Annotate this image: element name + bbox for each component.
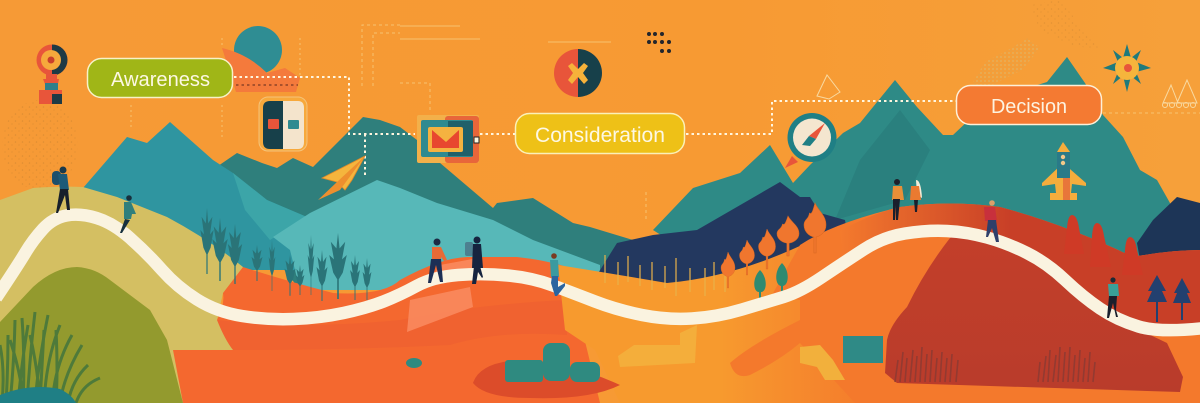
- label: Consideration: [516, 114, 684, 154]
- ground: small teal pebble: [406, 358, 422, 368]
- ground: yellow stone: [800, 345, 845, 380]
- speckle texture top right: [1030, 0, 1100, 50]
- ground: yellow orange: [558, 245, 880, 403]
- person: orange jacket walker: [428, 238, 447, 283]
- label: Decision: Decision: [991, 96, 1067, 118]
- icon: triangles and circles: [817, 75, 1197, 108]
- person: hiker on left hill: [52, 166, 70, 213]
- decorative circuit lines: [131, 25, 1200, 222]
- ground: darker orange band: [213, 300, 567, 350]
- back mountains: [83, 57, 1200, 290]
- green round trees: [754, 263, 788, 299]
- grass bottom left: [0, 312, 100, 403]
- teal mound bottom left: [0, 387, 76, 403]
- grass stems on yellow slope: [605, 255, 725, 296]
- icon: X badge: [554, 49, 602, 97]
- mountain: light teal: [273, 180, 600, 290]
- mountain: teal facet: [233, 173, 307, 240]
- sand texture upper right: [972, 38, 1040, 86]
- label: Consideration: Consideration: [535, 124, 665, 147]
- icon: dot cluster: [647, 32, 671, 53]
- ground: front red hill: [885, 232, 1183, 392]
- label: Decision: [956, 86, 1102, 124]
- person: red backpack hiker: [984, 200, 999, 242]
- mountain: teal peaks: [83, 122, 330, 270]
- ground: dark red patch: [473, 360, 620, 398]
- navy pine trees: [1147, 275, 1191, 322]
- ground: khaki hill: [0, 187, 243, 403]
- grass in red hill: [895, 347, 1095, 382]
- icon: location pin tower: [36, 44, 68, 104]
- person: hiker with pack lower right: [1107, 277, 1119, 318]
- ground: teal stones: [505, 343, 600, 382]
- ground: orange right: [730, 204, 1200, 403]
- mountain: dark teal range: [218, 117, 640, 290]
- mountain: navy range: [597, 182, 850, 290]
- person: woman white hair: [910, 180, 922, 212]
- speckle texture left: [2, 100, 78, 190]
- icon: email envelope: [417, 115, 479, 163]
- icon: teal sun and orange hill: [222, 26, 300, 92]
- icon: paper plane: [318, 156, 365, 200]
- ground: teal box: [843, 336, 883, 363]
- ground: red orange: [173, 257, 600, 403]
- person: woman orange top: [892, 179, 904, 220]
- red cones: [1064, 215, 1143, 275]
- icon: rocket: [1042, 142, 1086, 200]
- ground: pale patch: [407, 258, 480, 332]
- flame trees: [721, 203, 826, 288]
- mountain: right teal range: [653, 57, 1190, 260]
- ground: right ridge above path: [840, 204, 1200, 333]
- mountain: right teal facet: [835, 110, 930, 220]
- person: backpacker: [465, 236, 483, 284]
- icon: compass: [785, 113, 836, 168]
- ground: yellow patch: [618, 325, 697, 367]
- ground layers: [0, 187, 1200, 403]
- person: teal shirt walker: [550, 253, 565, 296]
- icon: star compass sun: [1103, 44, 1151, 92]
- person: walker descending: [120, 195, 136, 233]
- mountain: navy right: [1137, 197, 1200, 260]
- label: Awareness: [88, 58, 232, 98]
- plants: teal spiky shrubs: [200, 208, 371, 301]
- connector dotted lines: [234, 77, 956, 178]
- journey path: [0, 215, 1200, 330]
- ground: olive hill: [0, 267, 183, 403]
- label: Awareness: Awareness: [111, 69, 210, 91]
- icon: split phone app: [259, 97, 307, 151]
